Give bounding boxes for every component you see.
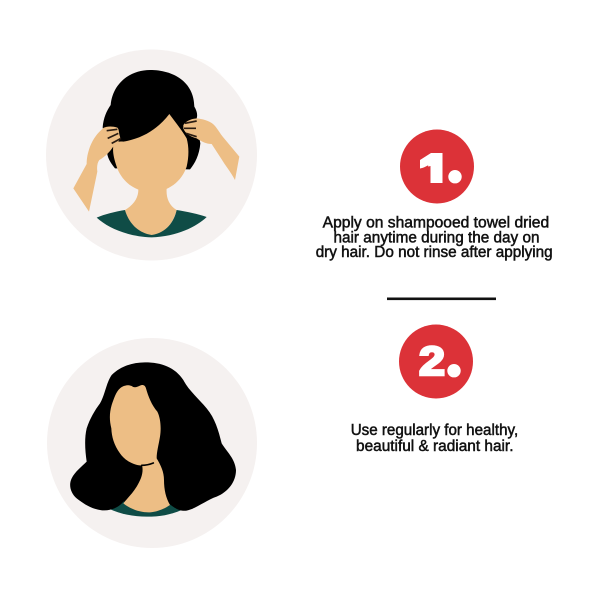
hair <box>103 70 200 169</box>
step 2 text <box>351 422 518 455</box>
neck and chest <box>125 188 177 237</box>
background circle 2 <box>47 338 257 548</box>
shirt <box>97 210 207 237</box>
step 2 text: beautiful & radiant hair. <box>356 438 514 455</box>
right hand finger lines <box>184 121 197 137</box>
background circle 1 <box>46 50 257 260</box>
left hand finger lines <box>107 129 121 143</box>
step 2 text: Use regularly for healthy, <box>351 422 518 439</box>
panel: step 2 instruction <box>351 324 518 455</box>
step 1 text: dry hair. Do not rinse after applying <box>316 244 553 261</box>
number badge 1 <box>400 130 474 204</box>
number badge 2: 2 <box>419 338 445 384</box>
left arm and hand <box>73 126 120 212</box>
figure with long wavy hair <box>70 362 236 517</box>
number badge 2 <box>399 324 473 398</box>
neck <box>123 458 170 512</box>
figure applying product to hair <box>73 70 239 237</box>
face <box>113 114 188 192</box>
step 1 text <box>316 214 553 261</box>
face <box>110 385 161 466</box>
panel: step 1 instruction <box>316 130 553 261</box>
step 1 text: Apply on shampooed towel dried <box>323 214 549 232</box>
number badge 1: 1 <box>420 144 450 193</box>
step 1 text: hair anytime during the day on <box>334 230 540 246</box>
hair <box>70 362 236 511</box>
panel: step 1 illustration <box>46 50 257 260</box>
chin shadow line <box>142 463 153 465</box>
right arm and hand <box>183 118 239 180</box>
shirt <box>108 500 182 517</box>
panel: step 2 illustration <box>47 338 257 548</box>
divider line <box>387 298 496 300</box>
